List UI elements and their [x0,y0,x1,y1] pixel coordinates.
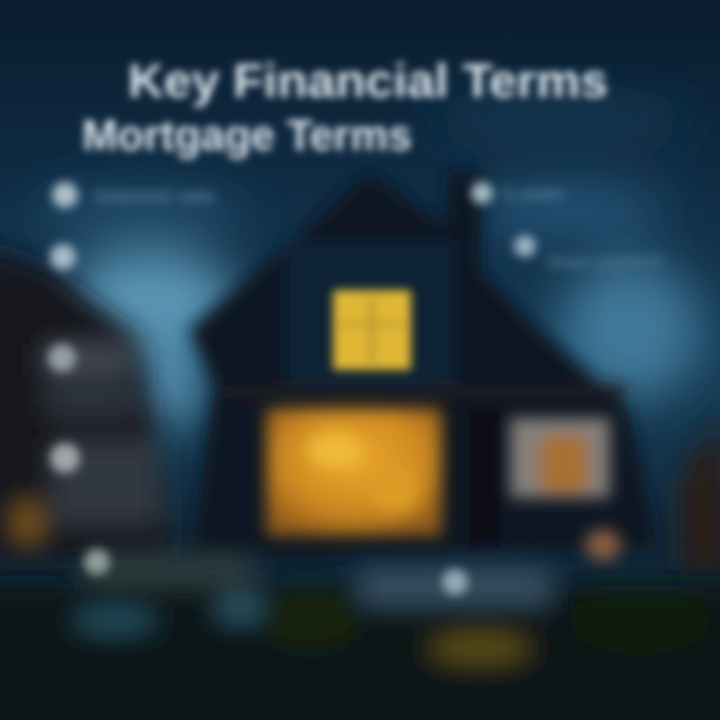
bullet list: upper right: Loan [505,183,565,205]
title: Key Financial Terms [128,54,608,107]
large glowing window [266,408,442,536]
bullet list: upper right [471,182,663,272]
neighbouring house left [0,245,175,560]
side window [510,418,610,498]
bullet list: left panel [48,344,468,595]
bullet list: upper right: Down payment [548,252,663,272]
porch light [585,529,621,561]
bullet list: upper left: Interest rate [95,186,215,208]
main house [190,170,660,561]
bullet list: upper left [50,182,215,270]
title [82,54,608,160]
title: Mortgage Terms [82,111,412,160]
upper window [333,290,411,370]
neighbouring house right [680,420,720,570]
house silhouette [190,170,660,560]
ground and foliage [0,555,720,720]
